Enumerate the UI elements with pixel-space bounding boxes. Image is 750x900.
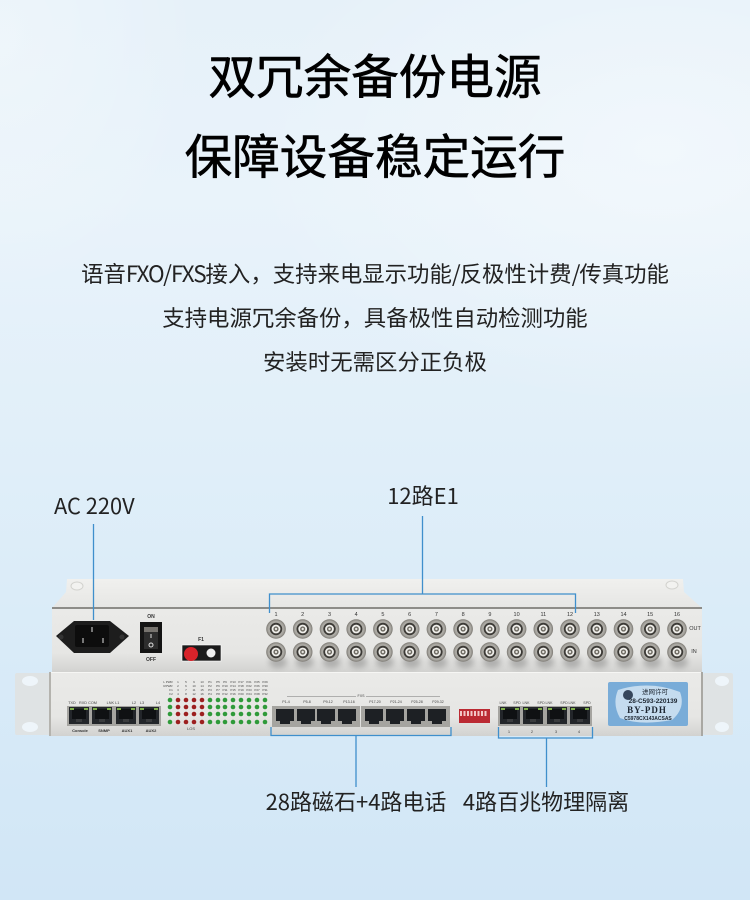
LED indicators: P1 <box>208 680 212 684</box>
LED indicators: F1 <box>169 688 173 692</box>
LED indicators: 15 <box>200 688 204 692</box>
title <box>185 39 565 188</box>
FXS phone ports: P29-32 <box>432 700 444 704</box>
power switch <box>140 614 162 663</box>
description text <box>81 257 669 377</box>
LAN ports: LNK <box>546 701 553 705</box>
DIP switch <box>459 709 490 723</box>
FXS phone ports: P21-24 <box>390 700 402 704</box>
LED indicators <box>163 680 268 731</box>
BNC number labels: 15 <box>647 612 653 618</box>
label: AC 220V: AC 220V <box>54 490 135 521</box>
management ports: SNMP <box>98 728 110 733</box>
FXS phone ports <box>272 694 450 727</box>
FXS phone ports: P17-20 <box>369 700 381 704</box>
FXS phone ports: P13-16 <box>343 700 355 704</box>
LED indicators: P13 <box>230 680 236 684</box>
LED indicators: P8 <box>216 692 220 696</box>
LED indicators: 14 <box>200 684 204 688</box>
LED indicators: 1 <box>177 680 179 684</box>
FXS phone ports: FXS <box>358 694 365 698</box>
LED indicators: 2 <box>177 684 179 688</box>
LED indicators: LOS <box>187 726 195 731</box>
BNC number labels: 16 <box>674 612 680 618</box>
label: 12路E1: 12路E1 <box>387 479 459 511</box>
management ports: Console <box>72 728 89 733</box>
LAN ports: SPD <box>513 701 521 705</box>
BNC number labels: 14 <box>620 612 627 618</box>
LED indicators: P28 <box>254 692 260 696</box>
right ear <box>701 672 733 736</box>
LED indicators: P25 <box>254 680 260 684</box>
BNC number labels: 7 <box>435 612 438 618</box>
LED indicators: P12 <box>222 692 228 696</box>
LED indicators: 4 <box>177 692 179 696</box>
BNC connectors <box>266 619 687 662</box>
BNC number labels: OUT <box>689 626 701 632</box>
left ear <box>15 672 51 736</box>
LAN ports: SPD <box>537 701 545 705</box>
LAN ports: 2 <box>531 729 534 734</box>
LED indicators: 10 <box>192 684 196 688</box>
LED indicators: P15 <box>230 688 236 692</box>
FXS phone ports: P5-8 <box>303 700 311 704</box>
LED indicators: 6 <box>185 684 187 688</box>
LED indicators: P9 <box>223 680 227 684</box>
label: 4路百兆物理隔离: 4路百兆物理隔离 <box>463 785 629 817</box>
label: 28路磁石+4路电话: 28路磁石+4路电话 <box>266 785 446 817</box>
LED indicators: P30 <box>262 684 268 688</box>
BNC number labels: 12 <box>567 612 573 618</box>
LAN ports: SPD <box>560 701 568 705</box>
LED indicators: P5 <box>216 680 220 684</box>
LED indicators: P6 <box>216 684 220 688</box>
title: 双冗余备份电源 <box>208 39 542 108</box>
BNC number labels: 11 <box>540 612 546 618</box>
power switch: ON <box>147 614 155 620</box>
approval sticker: 28-C593-220139 <box>629 698 678 705</box>
LAN ports: LNK <box>522 701 530 705</box>
management ports <box>67 701 161 733</box>
BNC number labels: 9 <box>488 612 491 618</box>
BNC number labels: 2 <box>301 612 304 618</box>
FXS phone ports: P25-28 <box>411 700 423 704</box>
LAN ports: 3 <box>555 729 558 734</box>
LED indicators: P10 <box>222 684 228 688</box>
title: 保障设备稳定运行 <box>185 119 565 188</box>
LED indicators: P26 <box>254 684 260 688</box>
LED indicators: P29 <box>262 680 268 684</box>
LED indicators: 16 <box>200 692 204 696</box>
FXS phone ports: P9-12 <box>323 700 333 704</box>
power switch: OFF <box>146 657 156 663</box>
LAN ports <box>498 701 592 734</box>
LED indicators: P32 <box>262 692 268 696</box>
description text: 安装时无需区分正负极 <box>263 345 487 377</box>
description text: 语音FXO/FXS接入，支持来电显示功能/反极性计费/传真功能 <box>81 257 669 289</box>
LED indicators: P18 <box>238 684 244 688</box>
LED indicators: F2 <box>169 692 173 696</box>
BNC number labels: 4 <box>355 612 358 618</box>
LAN ports: LNK <box>568 701 576 705</box>
LED indicators: P22 <box>246 684 252 688</box>
LED indicators: P23 <box>246 688 252 692</box>
LED indicators: 5 <box>185 680 187 684</box>
LED indicators: 8 <box>185 692 187 696</box>
fuse F1 <box>182 637 221 661</box>
LED indicators: P27 <box>254 688 260 692</box>
LED indicators: L PWR <box>163 680 174 684</box>
LED indicators: P7 <box>216 688 220 692</box>
FXS phone ports: P1-4 <box>282 700 290 704</box>
LED indicators: P20 <box>238 692 244 696</box>
bottom chassis <box>15 672 733 736</box>
management ports: RXD COM <box>79 701 97 705</box>
management ports: LNK L1 <box>107 701 119 705</box>
LED indicators: P21 <box>246 680 252 684</box>
BNC shadows <box>269 656 688 668</box>
LED indicators: 3 <box>177 688 179 692</box>
LAN ports: 4 <box>578 729 581 734</box>
management ports: L4 <box>156 701 160 705</box>
approval sticker: 进网许可 <box>642 686 668 696</box>
LAN ports: LNK <box>500 701 507 705</box>
approval sticker <box>608 682 688 726</box>
BNC number labels: 8 <box>462 612 465 618</box>
top chassis <box>52 579 702 672</box>
LED indicators: 13 <box>200 680 204 684</box>
BNC number labels: 3 <box>328 612 331 618</box>
approval sticker: BY-PDH <box>627 705 667 715</box>
BNC number labels: 5 <box>381 612 384 618</box>
LED indicators: P24 <box>246 692 252 696</box>
LED indicators: 12 <box>192 692 196 696</box>
power inlet <box>56 621 129 653</box>
LAN ports: 1 <box>508 729 511 734</box>
BNC number labels: 10 <box>514 612 520 618</box>
BNC number labels: 13 <box>594 612 600 618</box>
fuse F1: F1 <box>198 637 204 643</box>
LED indicators: P4 <box>208 692 212 696</box>
BNC number labels: 6 <box>408 612 411 618</box>
BNC number labels: IN <box>691 649 697 655</box>
LAN ports: SPD <box>583 701 591 705</box>
approval sticker: C5978CX143ACSAS <box>624 716 672 722</box>
LED indicators: RPWR <box>163 684 173 688</box>
LED indicators: P14 <box>230 684 236 688</box>
BNC number labels <box>274 612 701 655</box>
LED indicators: P2 <box>208 684 212 688</box>
LED indicators: P17 <box>238 680 244 684</box>
LED indicators: P11 <box>222 688 228 692</box>
BNC number labels: 1 <box>274 612 278 618</box>
callout lines <box>94 516 592 787</box>
management ports: L2 <box>132 701 136 705</box>
management ports: L3 <box>140 701 144 705</box>
management ports: TXD <box>68 701 76 705</box>
management ports: AUX1 <box>122 728 133 733</box>
LED indicators: P3 <box>208 688 212 692</box>
LED indicators: P16 <box>230 692 236 696</box>
LED indicators: 9 <box>193 680 195 684</box>
LED indicators: P19 <box>238 688 244 692</box>
LED indicators: 7 <box>185 688 187 692</box>
LED indicators: 11 <box>192 688 196 692</box>
management ports: AUX2 <box>146 728 157 733</box>
description text: 支持电源冗余备份，具备极性自动检测功能 <box>162 301 588 333</box>
LED indicators: P31 <box>262 688 268 692</box>
